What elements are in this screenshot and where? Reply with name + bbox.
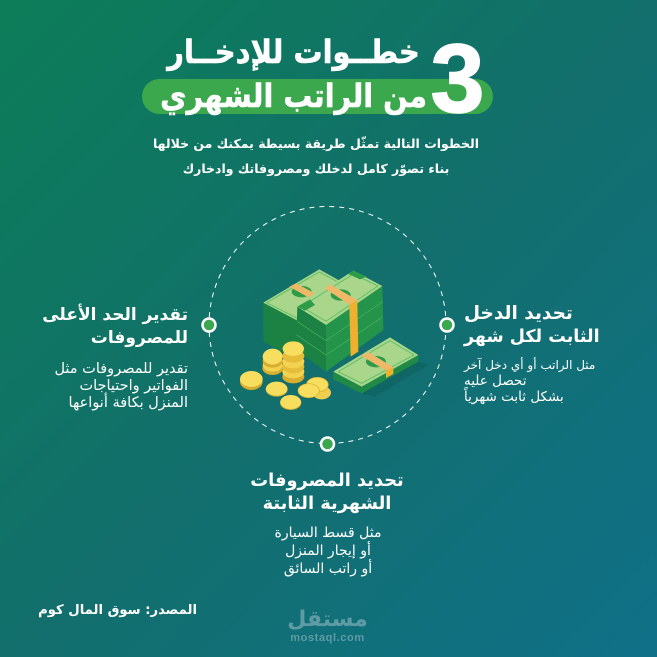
- text: bottom step: مثل قسط السيارة: [275, 525, 381, 541]
- text: left step: المنزل بكافة أنواعها: [69, 394, 188, 410]
- marker: bottom: [321, 438, 334, 450]
- text: bottom step: [275, 525, 381, 577]
- text: left step: تقدير للمصروفات مثل: [54, 360, 188, 376]
- heading: bottom step: الشهرية الثابتة: [263, 492, 391, 514]
- marker: right: [440, 318, 454, 332]
- heading: right step: [463, 302, 600, 346]
- heading: right step: تحديد الدخل: [464, 302, 573, 324]
- text: bottom step: أو إيجار المنزل: [285, 543, 371, 559]
- heading: left step: للمصروفات: [91, 328, 188, 348]
- panel: left step: [42, 304, 188, 410]
- text: bottom step: أو راتب السائق: [284, 561, 372, 577]
- text: left step: [54, 360, 188, 410]
- panel: right step: [463, 302, 600, 405]
- back-left stack: [263, 269, 353, 360]
- heading: left step: [42, 304, 188, 348]
- panel: bottom step: [250, 470, 404, 577]
- heading: bottom step: تحديد المصروفات: [250, 470, 404, 490]
- text: right step: بشكل ثابت شهرياً: [464, 389, 564, 405]
- big number 3: 3: [431, 24, 484, 133]
- front stack: [296, 271, 383, 372]
- intro text: بناء تصوّر كامل لدخلك ومصروفاتك وادخارك: [183, 161, 449, 176]
- heading: right step: الثابت لكل شهر: [464, 326, 600, 346]
- loose coins: [240, 371, 331, 410]
- title pill: [142, 79, 493, 114]
- heading: bottom step: [250, 470, 404, 514]
- watermark Arabic: مستقل: [287, 607, 368, 632]
- intro text: الخطوات التالية تمثّل طريقة بسيطة يمكنك من خلالها: [153, 136, 479, 151]
- source: المصدر: سوق المال كوم: [38, 603, 197, 618]
- marker: left: [202, 318, 216, 332]
- coin stack: short: [262, 349, 283, 375]
- text: right step: مثل الراتب أو أي دخل آخر: [464, 358, 595, 372]
- text: right step: تحصل عليه: [464, 373, 527, 389]
- text: left step: الفواتير واحتياجات: [79, 378, 188, 394]
- icon: money stacks and coins: [240, 269, 428, 410]
- watermark: mostaql: [287, 607, 368, 644]
- coin stack: tall: [282, 341, 304, 383]
- heading: left step: تقدير الحد الأعلى: [42, 304, 188, 324]
- title line 1: خطــوات للإدخــار: [167, 33, 420, 71]
- title line 2: من الراتب الشهري: [160, 77, 427, 115]
- bottom bundle: [333, 337, 418, 393]
- watermark Latin: mostaql.com: [290, 632, 365, 644]
- bottom bundle shadow: [362, 362, 428, 397]
- intro text: [153, 136, 479, 176]
- text: right step: [464, 357, 595, 405]
